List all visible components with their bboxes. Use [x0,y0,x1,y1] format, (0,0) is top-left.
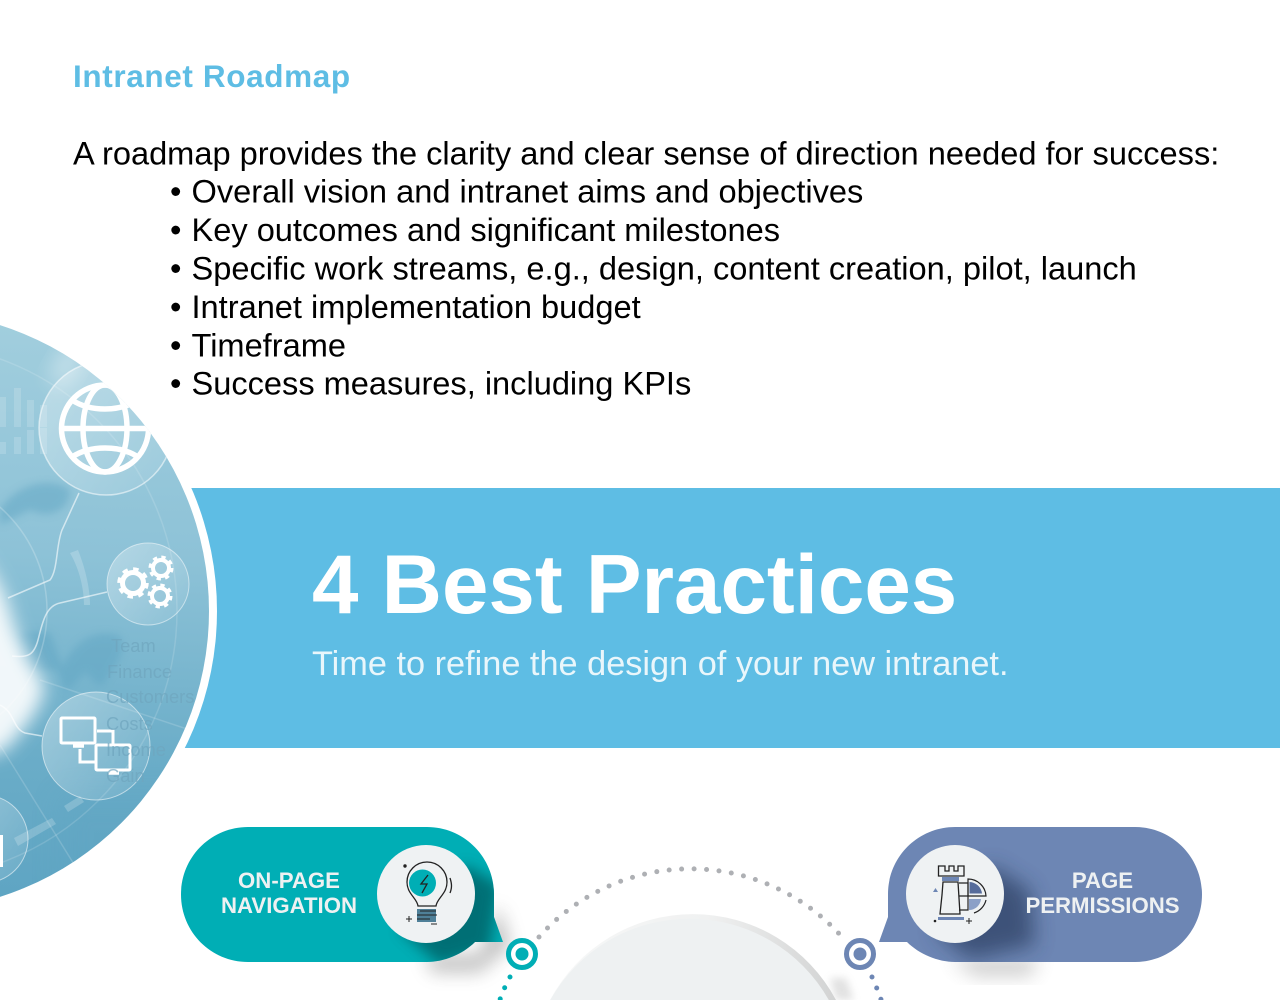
intro text block [73,134,1219,402]
white cloud highlight [0,540,44,760]
target marker: teal [508,940,536,968]
faded bar chart backdrop [0,388,47,454]
bullet list: Key outcomes and significant milestones [192,211,780,248]
icon: monitors [61,718,130,773]
pill label [1025,868,1180,918]
faded table text: Customers [106,686,194,707]
faded table text: Team [111,635,156,656]
bullet list: • [170,250,181,286]
icon circle: gears [107,543,189,625]
target marker: blue [846,940,874,968]
banner heading: 4 Best Practices [312,537,957,631]
central circle [550,914,854,1000]
icon: light bulb [403,862,452,924]
faded table text [106,635,194,786]
intro text block: A roadmap provides the clarity and clear sense of direction needed for success: [73,134,1219,171]
bullet list: • [170,211,181,248]
faded table text: Gain [106,765,145,786]
icon: castle tower and shield [933,866,986,924]
icon disc [377,845,475,943]
bullet list [170,173,1137,402]
bullet list: Intranet implementation budget [192,288,641,325]
bullet list: Specific work streams, e.g., design, content creation, pilot, launch [192,250,1137,286]
bullet list: • [170,326,181,363]
icon circle: globe [39,361,173,495]
map shapes [0,481,142,866]
bullet list: Success measures, including KPIs [192,365,691,402]
pill label: PERMISSIONS [1025,893,1180,918]
light connector lines [0,358,185,862]
bullet list: • [170,365,181,402]
banner subtitle: Time to refine the design of your new intranet. [312,645,1008,683]
icon disc [906,845,1004,943]
pill label: ON-PAGE [238,868,340,893]
right pill: page permissions [879,827,1202,976]
icon circle: monitors [42,692,150,800]
pill label: PAGE [1072,868,1133,893]
left pill: on-page navigation [181,827,510,972]
bullet list: Overall vision and intranet aims and objectives [192,173,863,210]
faded table text: Costs [106,713,153,734]
title: Intranet Roadmap [73,58,351,94]
bullet list: • [170,173,181,210]
banner [150,488,1280,748]
bullet list: Timeframe [192,326,346,363]
faded table text: Income [106,739,166,760]
faded table text: Finance [107,661,172,682]
circular technology image [0,325,217,897]
bullet list: • [170,288,181,325]
dotted arc [500,869,881,1000]
icon: server [0,835,3,867]
icon circle: partial lower circle [0,795,28,883]
pill label: NAVIGATION [221,893,357,918]
icon: gears [119,557,172,607]
icon: globe [61,385,149,472]
pill label [221,868,357,918]
